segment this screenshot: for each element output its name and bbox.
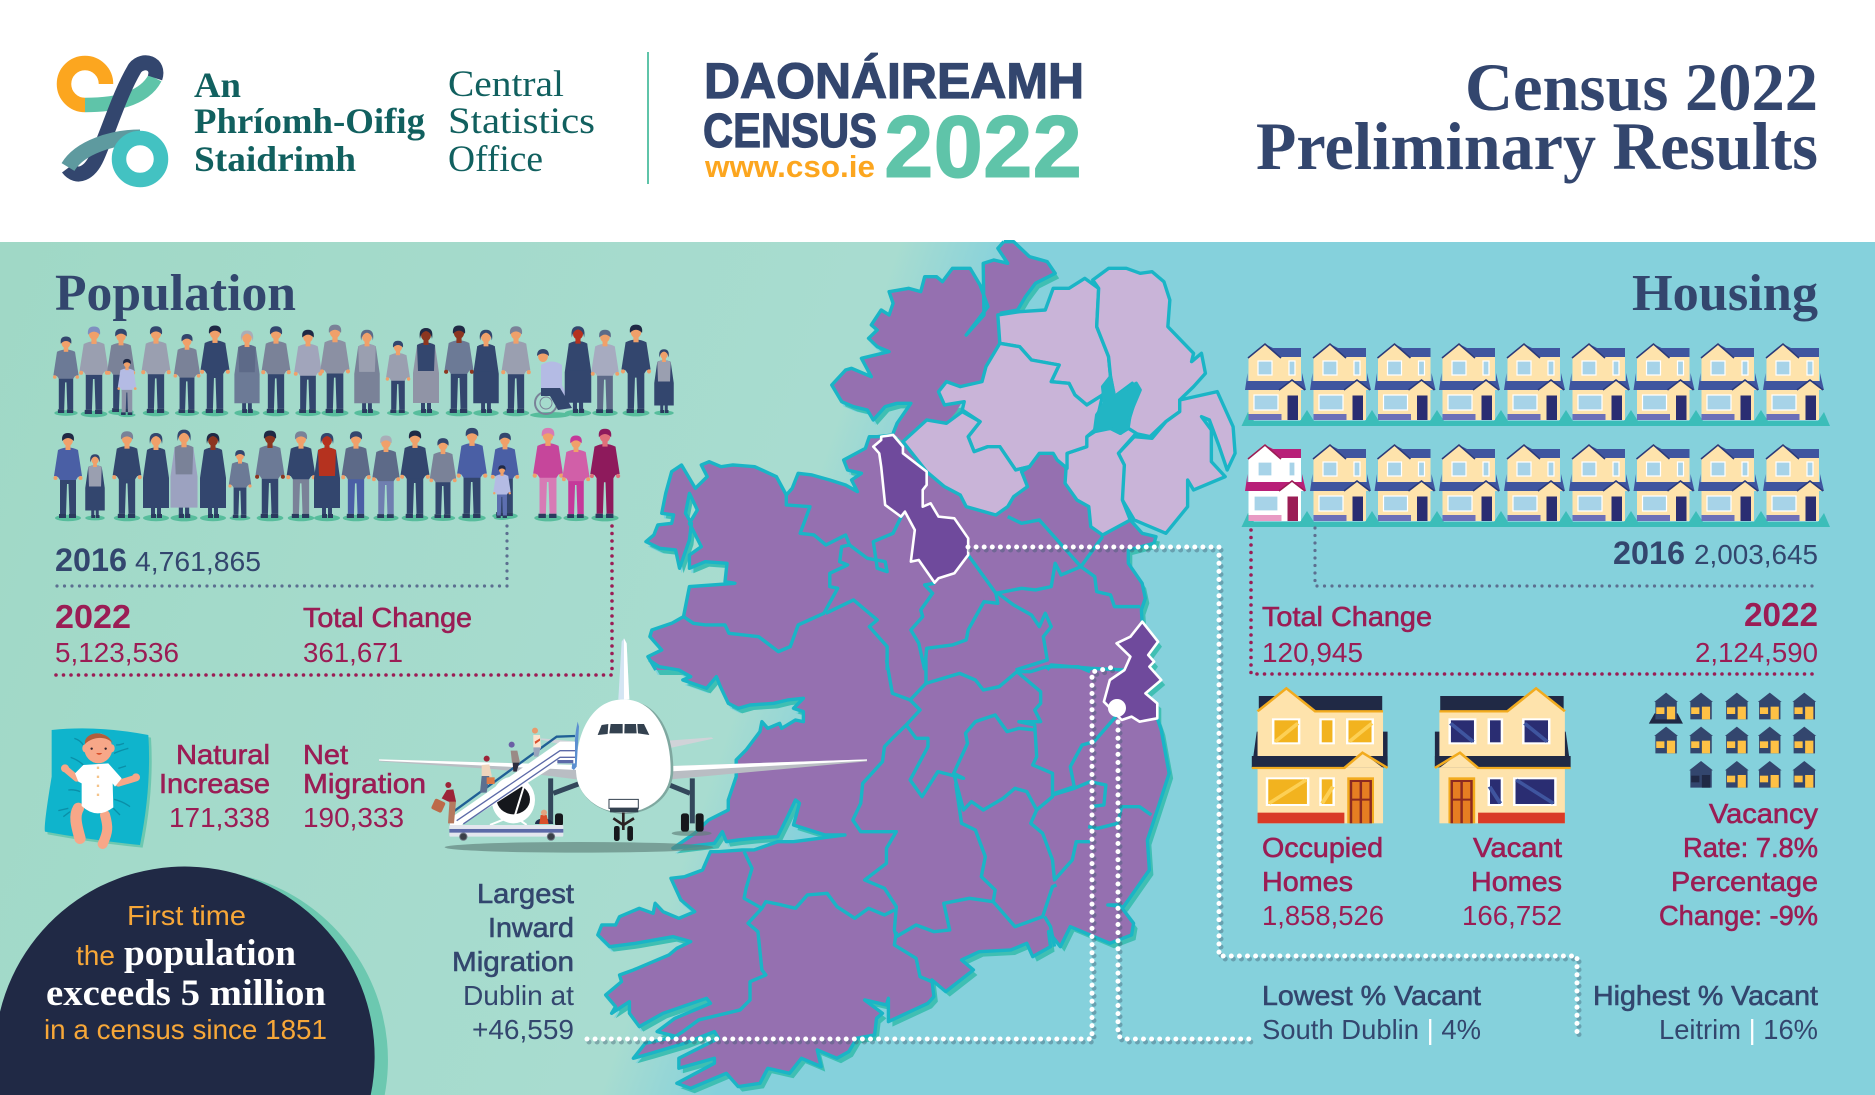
housing total change: Total Change [1262,601,1432,632]
vacant homes: Vacant [1473,832,1562,863]
occupied homes: 1,858,526 [1262,900,1384,931]
housing total change [1262,601,1432,668]
highlighted new residents [533,428,620,521]
largest inward migration [452,878,574,1045]
icon: baby [45,728,152,848]
header divider [647,52,649,184]
people row 2 [54,428,620,521]
2016 housing: 2016 [1613,535,1685,571]
population heading: Population [55,265,296,322]
CSO Irish name: Phríomh-Oifig [194,101,425,141]
CSO Irish name [194,65,425,179]
infographic background [0,242,1875,1095]
CSO English name: Statistics [448,101,595,142]
callout text: exceeds 5 million [46,973,326,1014]
housing heading: Housing [1632,265,1818,322]
vacancy rate: Vacancy [1709,798,1818,829]
Lough Neagh [1095,377,1140,433]
county borders south [598,660,1169,1088]
2022 population dotted line [55,526,612,675]
callout circle [0,867,375,1095]
callout text [44,900,327,1045]
vacancy rate: Percentage [1671,866,1818,897]
South Dublin marker [1108,699,1126,717]
icon: occupied home [1252,688,1388,823]
Leitrim highlight [873,435,968,583]
highest vacancy: Highest % Vacant [1593,980,1818,1011]
icon: vacant home [1435,688,1571,823]
lowest vacancy [1262,980,1481,1045]
callout text: in a census since 1851 [44,1014,327,1045]
net migration [303,739,426,833]
occupied homes: Homes [1262,866,1353,897]
census wordmark: www.cso.ie [704,149,875,184]
wheelchair person [530,349,572,418]
2016 population [55,542,261,578]
icon: vacancy rate houses [1649,693,1816,788]
highest vacancy: Leitrim | 16% [1659,1014,1818,1045]
house row 1 [1242,343,1830,426]
largest inward migration: +46,559 [472,1014,574,1045]
CSO English name: Office [448,139,543,180]
map of Ireland [598,242,1235,1093]
natural increase: Increase [159,768,270,799]
white dotted connector lines [587,547,1579,1042]
natural increase: Natural [176,739,270,770]
icon: airplane with stairs [379,638,867,853]
house row 2 [1242,444,1830,527]
callout text: population [124,933,296,974]
census wordmark [703,53,1084,196]
2022 population [55,598,179,668]
2022 housing: 2,124,590 [1695,637,1818,668]
2022 population: 5,123,536 [55,637,179,668]
vacancy rate: Rate: 7.8% [1683,832,1818,863]
vacant homes [1462,832,1562,931]
2022 housing: 2022 [1744,596,1818,633]
CSO English name: Central [448,64,564,105]
main title [1256,49,1818,184]
2022 housing dotted line [1251,530,1814,674]
header band [0,0,1875,243]
housing total change: 120,945 [1262,637,1363,668]
population total change: Total Change [303,602,472,633]
census wordmark: DAONÁIREAMH [704,53,1084,109]
2016 population dotted line [55,526,507,586]
callout text: the [76,940,115,971]
callout text: First time [127,900,246,931]
population total change [303,602,472,668]
occupied homes: Occupied [1262,832,1383,863]
2022 population: 2022 [55,598,131,635]
census wordmark: CENSUS [703,105,877,158]
highest vacancy [1593,980,1818,1045]
CSO Irish name: Staidrimh [194,139,356,179]
vacant homes: 166,752 [1462,900,1562,931]
lowest vacancy: Lowest % Vacant [1262,980,1481,1011]
2016 housing [1613,535,1818,571]
lowest vacancy: South Dublin | 4% [1262,1014,1481,1045]
Northern Ireland counties [903,268,1235,535]
natural increase [159,739,270,833]
largest inward migration: Migration [452,946,574,977]
2022 housing [1695,596,1818,668]
map shadows [600,247,1173,1093]
net migration: Net [303,739,348,770]
natural increase: 171,338 [169,802,270,833]
census wordmark: 2022 [884,97,1082,196]
South Dublin highlight [1104,622,1161,722]
population total change: 361,671 [303,637,403,668]
largest inward migration: Largest [477,878,574,909]
occupied homes [1262,832,1384,931]
net migration: Migration [303,768,426,799]
2016 population: 4,761,865 [135,546,261,577]
net migration: 190,333 [303,802,404,833]
callout: first time population exceeds 5 million [0,867,388,1095]
vacancy rate [1659,798,1818,931]
county borders north [646,242,1156,670]
vacant homes: Homes [1471,866,1562,897]
largest inward migration: Inward [488,912,574,943]
republic counties [598,242,1169,1088]
2016 housing: 2,003,645 [1694,539,1818,570]
main title: Census 2022 [1465,49,1818,125]
callout shadow [100,870,388,1095]
largest inward migration: Dublin at [463,980,574,1011]
main title: Preliminary Results [1256,108,1818,184]
2016 housing dotted line [1315,528,1818,586]
CSO logo mark [64,63,161,180]
2016 population: 2016 [55,542,127,578]
people row 1 [53,325,674,418]
vacancy rate: Change: -9% [1659,900,1818,931]
CSO Irish name: An [194,65,241,105]
CSO English name [448,64,595,180]
